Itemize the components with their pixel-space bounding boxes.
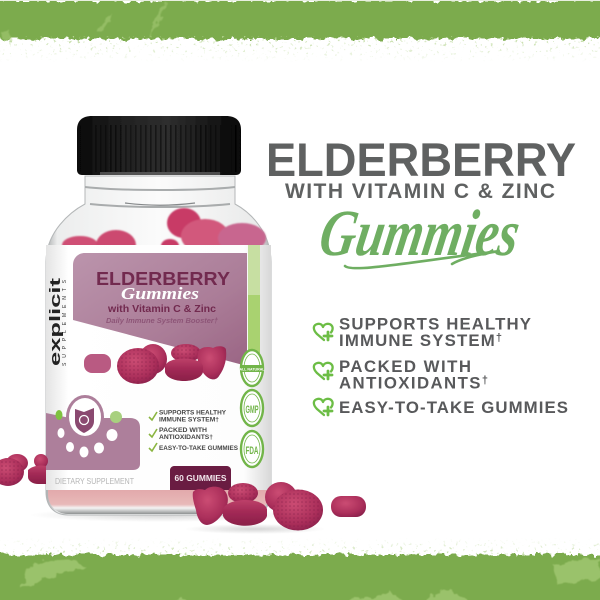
cap (77, 116, 241, 175)
60 gummies tag (170, 466, 231, 490)
label benefits list (149, 410, 238, 452)
elderberry title panel (73, 253, 247, 366)
benefit bullets: † (482, 374, 488, 386)
main title: ELDERBERRY (266, 134, 576, 187)
loose gummies left (0, 454, 48, 486)
benefit bullets: ANTIOXIDANTS (339, 374, 480, 392)
gummies visible in jar (62, 208, 266, 260)
benefit bullets (314, 314, 568, 417)
benefit bullets: EASY-TO-TAKE GUMMIES (339, 398, 568, 417)
certification badges: ALL NATURAL (239, 368, 265, 372)
immune system panel (46, 395, 140, 470)
certification badges: FDA (246, 445, 259, 457)
loose gummies front (185, 482, 366, 534)
label benefits list: IMMUNE SYSTEM† (159, 416, 220, 424)
bottom green brush band (0, 538, 600, 600)
brand logo: explicit (47, 278, 64, 366)
label gummies (84, 344, 226, 384)
brand logo: SUPPLEMENTS (62, 279, 68, 366)
top green brush band (0, 0, 600, 62)
elderberry title panel: Gummies (121, 284, 199, 303)
green stripe (248, 245, 260, 353)
gummies seen below label (48, 490, 269, 514)
label benefits list: ANTIOXIDANTS† (159, 434, 214, 441)
label base (46, 245, 271, 490)
label benefits list: SUPPORTS HEALTHY (159, 410, 227, 416)
60 gummies tag: 60 GUMMIES (174, 474, 227, 483)
elderberry title panel: ELDERBERRY (96, 268, 231, 289)
certification badges: GMP (246, 404, 258, 416)
elderberry title panel: Daily Immune System Booster† (106, 316, 219, 325)
brand logo (47, 278, 68, 366)
elderberry title panel: with Vitamin C & Zinc (107, 304, 216, 315)
certification badges (239, 350, 265, 467)
gummies script heading: Gummies (314, 197, 525, 270)
neck highlights (85, 187, 235, 207)
label benefits list: PACKED WITH (159, 427, 207, 434)
benefit bullets: SUPPORTS HEALTHY (339, 314, 531, 334)
product bottle (30, 116, 290, 522)
subtitle: WITH VITAMIN C & ZINC (285, 180, 555, 203)
glass jar body (46, 176, 271, 515)
dietary supplement: DIETARY SUPPLEMENT (55, 476, 135, 486)
icon: heart plus (314, 324, 333, 415)
benefit bullets: † (496, 332, 502, 344)
label benefits list: EASY-TO-TAKE GUMMIES (159, 445, 238, 452)
shield icon (75, 408, 94, 433)
benefit bullets: PACKED WITH (339, 357, 471, 376)
benefit bullets: IMMUNE SYSTEM (339, 331, 495, 350)
